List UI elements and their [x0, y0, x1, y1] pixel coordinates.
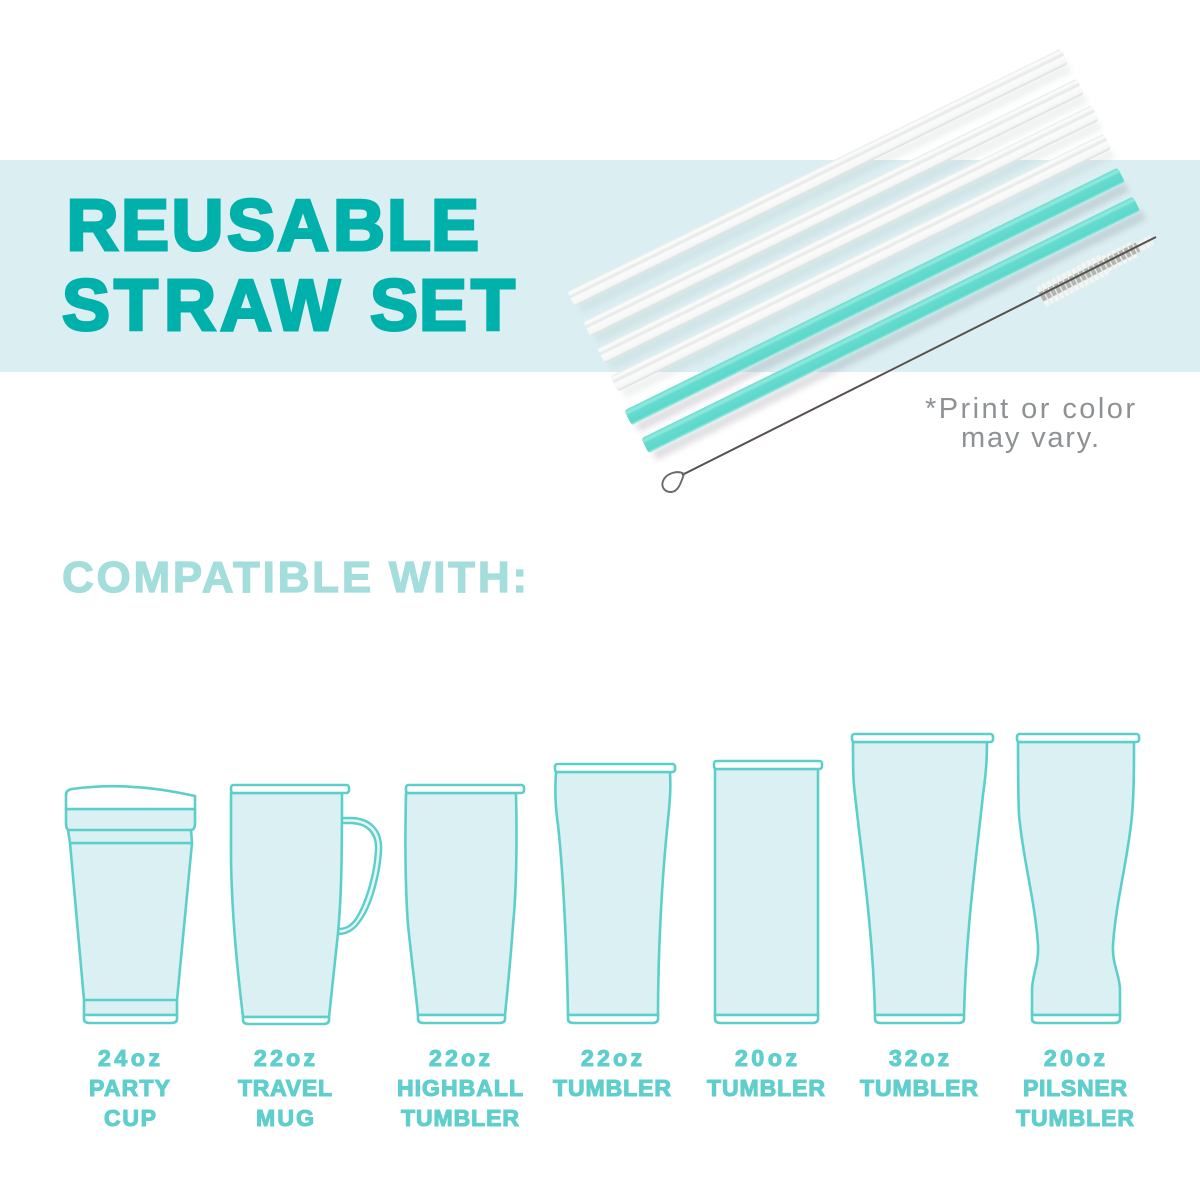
label: 20oz tumbler: 20oz: [735, 1045, 797, 1071]
label: 24oz party cup: CUP: [104, 1105, 156, 1131]
mug handle: [338, 818, 381, 934]
label: 32oz tumbler: TUMBLER: [860, 1075, 978, 1101]
label: 22oz tumbler: 22oz: [581, 1045, 642, 1071]
clear straw 4: [610, 134, 1115, 400]
label: 32oz tumbler: [860, 1045, 978, 1101]
label: 22oz tumbler: [553, 1045, 671, 1101]
clear straw 2: [583, 79, 1088, 345]
label: 22oz highball tumbler: HIGHBALL: [397, 1075, 523, 1101]
teal straw 2: [641, 196, 1146, 462]
label: 20oz pilsner tumbler: PILSNER: [1023, 1075, 1127, 1101]
cleaning brush: [662, 237, 1156, 492]
label: 20oz tumbler: [707, 1045, 825, 1101]
straw set photo: [567, 49, 1156, 492]
label: 24oz party cup: PARTY: [89, 1075, 170, 1101]
label: 22oz tumbler: TUMBLER: [553, 1075, 671, 1101]
title: REUSABLE: [66, 186, 479, 266]
clear straw 1: [567, 49, 1072, 315]
footnote: may vary.: [961, 422, 1100, 454]
label: 22oz travel mug: TRAVEL: [238, 1075, 332, 1101]
label: 22oz highball tumbler: 22oz: [429, 1045, 490, 1071]
footnote: [925, 393, 1136, 454]
label: 22oz travel mug: 22oz: [254, 1045, 315, 1071]
label: 32oz tumbler: 32oz: [889, 1045, 949, 1071]
cup: 22oz tumbler: [555, 764, 675, 1023]
cup: 20oz tumbler: [714, 761, 822, 1023]
clear straw 3: [597, 105, 1103, 372]
label: 20oz pilsner tumbler: TUMBLER: [1016, 1105, 1134, 1131]
label: 24oz party cup: 24oz: [98, 1045, 160, 1071]
label: 20oz tumbler: TUMBLER: [707, 1075, 825, 1101]
cup: 20oz pilsner tumbler: [1017, 734, 1139, 1023]
cup: 32oz tumbler: [852, 734, 993, 1023]
cup: 24oz party cup: [66, 786, 195, 1023]
title: [0, 186, 515, 346]
cup: 22oz highball tumbler: [405, 785, 524, 1023]
teal straw 1: [624, 168, 1129, 434]
label: 22oz highball tumbler: TUMBLER: [401, 1105, 519, 1131]
label: 24oz party cup: [89, 1045, 170, 1131]
label: 20oz pilsner tumbler: [1016, 1045, 1134, 1131]
cup: 22oz travel mug: [231, 785, 381, 1024]
compatible with heading: COMPATIBLE WITH:: [62, 553, 527, 602]
label: 22oz travel mug: MUG: [256, 1105, 314, 1131]
label: 22oz travel mug: [238, 1045, 332, 1131]
footnote: *Print or color: [925, 393, 1136, 425]
label: 20oz pilsner tumbler: 20oz: [1044, 1045, 1105, 1071]
title: STRAW SET: [0, 266, 515, 346]
label: 22oz highball tumbler: [397, 1045, 523, 1131]
background band: [0, 160, 1200, 372]
